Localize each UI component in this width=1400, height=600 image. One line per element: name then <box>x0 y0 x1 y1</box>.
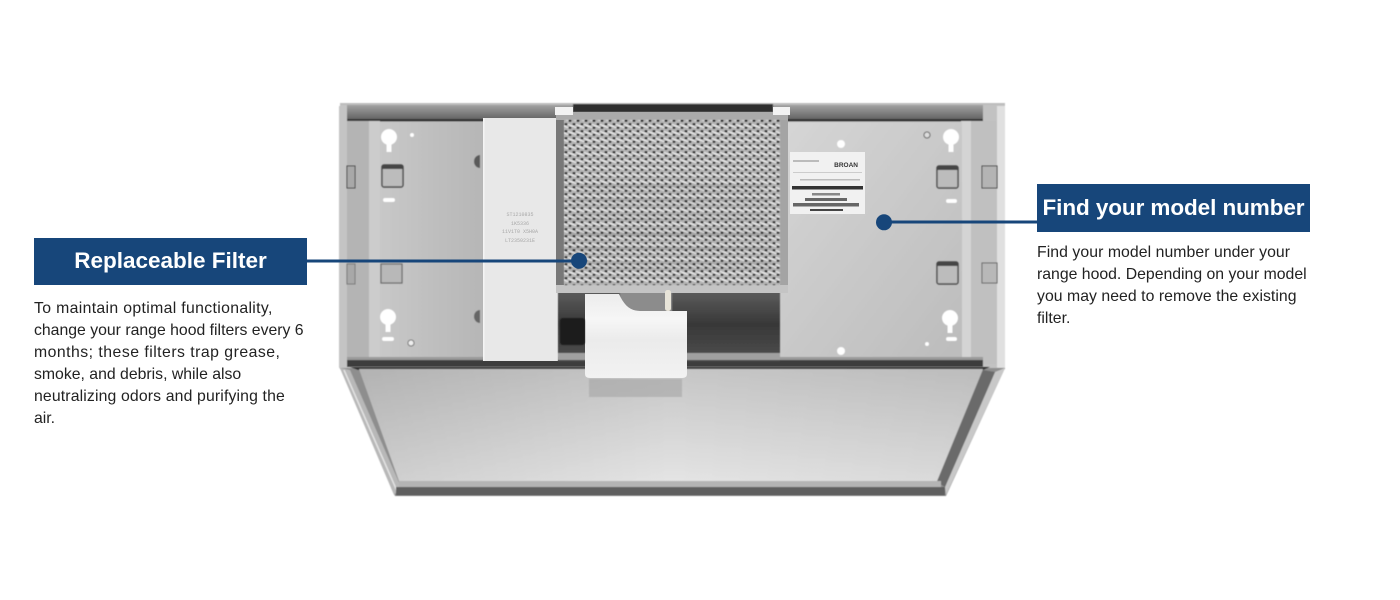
hood upper housing <box>339 103 1005 369</box>
white motor panel: 11V1T0 X5H0A <box>502 229 538 235</box>
text: filter description: smoke, and debris, while also <box>34 366 241 383</box>
text: filter description: change your range hood filters every 6 <box>34 322 304 339</box>
text: model number description: Find your model number under your <box>1037 244 1290 261</box>
text: filter description: months; these filters trap grease, <box>34 344 280 361</box>
mounting holes and tabs <box>347 129 997 355</box>
white motor panel: 1K5336 <box>511 221 529 227</box>
text: model number description <box>1037 244 1307 327</box>
white motor panel: ST1210835 <box>506 212 534 218</box>
heading: Replaceable Filter: Replaceable Filter <box>74 248 267 273</box>
heading: Find your model number <box>1037 184 1310 232</box>
text: filter description: neutralizing odors and purifying the <box>34 388 285 405</box>
white motor panel <box>483 118 558 361</box>
text: model number description: range hood. Depending on your model <box>1037 266 1307 283</box>
text: model number description: you may need to remove the existing <box>1037 288 1297 305</box>
model label sticker: BROAN <box>834 162 858 169</box>
white plastic box <box>560 290 687 397</box>
hood lower panel <box>340 367 1005 496</box>
heading: Replaceable Filter <box>34 238 307 285</box>
model label sticker <box>790 152 865 214</box>
text: filter description <box>34 300 304 427</box>
text: filter description: To maintain optimal functionality, <box>34 300 273 317</box>
text: model number description: filter. <box>1037 310 1070 327</box>
heading: Find your model number: Find your model number <box>1042 195 1304 220</box>
replaceable filter mesh <box>555 107 790 293</box>
dark bay under filter <box>558 288 780 362</box>
text: filter description: air. <box>34 410 55 427</box>
white motor panel: LT2350231E <box>505 238 535 244</box>
